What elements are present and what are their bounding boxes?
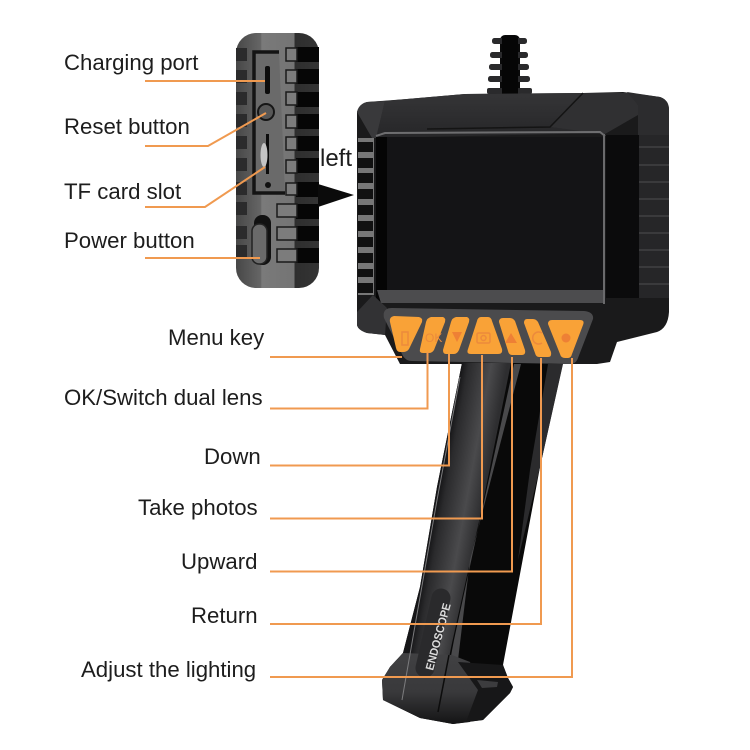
label: ENDOSCOPE badge: ENDOSCOPE <box>424 602 454 672</box>
panel: left side view of device <box>236 33 319 288</box>
panel: button strip: OK <box>425 331 442 345</box>
label: menu key: Menu key <box>168 325 265 350</box>
label: adjust the lighting: Adjust the lighting <box>81 657 256 682</box>
arrow: pointer to left side <box>318 184 354 207</box>
label: take photos: Take photos <box>138 495 258 520</box>
label: OK/switch dual lens: OK/Switch dual lens <box>64 385 263 410</box>
handle <box>382 363 563 724</box>
button: take photos <box>467 317 502 354</box>
screen <box>376 137 605 303</box>
button: adjust lighting <box>548 320 584 358</box>
label: TF card slot: TF card slot <box>64 179 181 204</box>
label: upward: Upward <box>181 549 257 574</box>
icon: cable strain relief <box>487 35 532 95</box>
device body <box>357 92 669 364</box>
button: return <box>524 319 551 357</box>
button: menu <box>390 316 422 352</box>
label: reset button: Reset button <box>64 114 190 139</box>
label: power button: Power button <box>64 228 195 253</box>
callout labels <box>64 50 265 682</box>
leader lines <box>145 81 572 677</box>
button: upward <box>499 318 525 355</box>
label: down: Down <box>204 444 261 469</box>
label: left: left <box>320 145 352 172</box>
label: charging port: Charging port <box>64 50 198 75</box>
button: down <box>443 317 469 354</box>
button: OK <box>420 317 445 353</box>
label: return: Return <box>191 603 258 628</box>
top plate <box>376 93 605 138</box>
left fins <box>358 138 374 295</box>
right fins <box>606 135 639 298</box>
panel: button strip <box>384 308 593 364</box>
